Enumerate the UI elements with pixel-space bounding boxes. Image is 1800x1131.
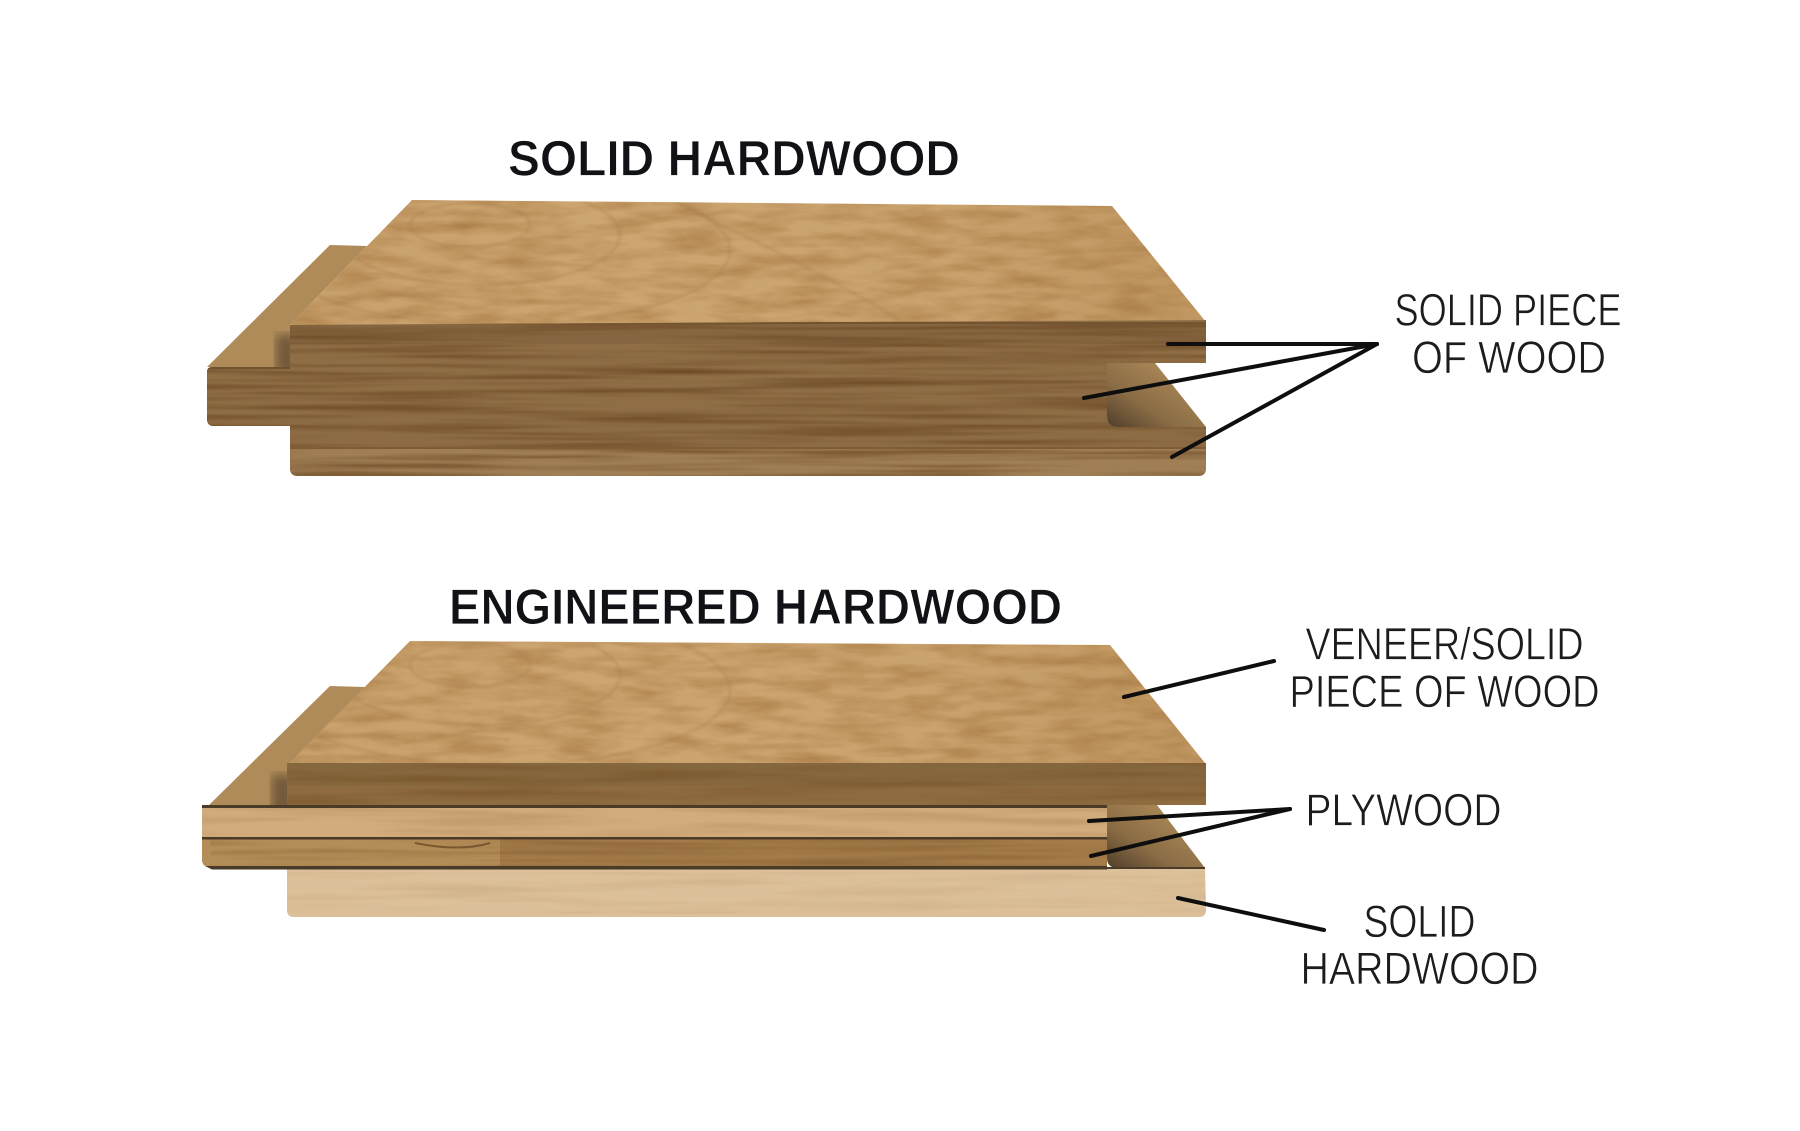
label: veneer / solid piece of wood <box>1290 618 1600 717</box>
plywood layer two <box>202 839 1107 867</box>
leader lines: plywood <box>1089 809 1290 856</box>
front face with grain <box>200 315 1210 480</box>
groove back <box>1107 805 1205 868</box>
veneer front face <box>287 763 1206 805</box>
leader line: solid hardwood <box>1178 898 1324 930</box>
dark glue lines <box>202 805 1205 870</box>
plywood layer one <box>202 807 1107 837</box>
veneer top surface <box>290 641 1205 763</box>
top surface with wood grain <box>290 200 1204 325</box>
tongue top surface <box>209 686 365 805</box>
title: engineered hardwood: ENGINEERED HARDWOOD <box>449 579 1062 635</box>
label: plywood: PLYWOOD <box>1306 784 1502 836</box>
solid hardwood base layer <box>287 869 1206 917</box>
plank: solid hardwood <box>207 200 1206 476</box>
label: veneer / solid piece of wood: VENEER/SOLID <box>1306 618 1584 670</box>
label: solid hardwood: SOLID <box>1364 896 1476 947</box>
label: solid piece of wood: SOLID PIECE <box>1394 284 1622 336</box>
groove <box>1107 363 1206 427</box>
label: solid piece of wood: OF WOOD <box>1412 332 1606 383</box>
title: solid hardwood: SOLID HARDWOOD <box>508 130 960 186</box>
label: solid piece of wood <box>1394 284 1622 383</box>
leader line: veneer <box>1124 661 1274 697</box>
plank: engineered hardwood <box>200 615 1220 917</box>
label: solid hardwood: HARDWOOD <box>1300 943 1538 994</box>
leader lines: solid piece of wood <box>1084 344 1377 457</box>
tongue top surface <box>207 245 367 367</box>
label: solid hardwood <box>1300 896 1538 994</box>
label: veneer / solid piece of wood: PIECE OF WOOD <box>1290 666 1600 717</box>
